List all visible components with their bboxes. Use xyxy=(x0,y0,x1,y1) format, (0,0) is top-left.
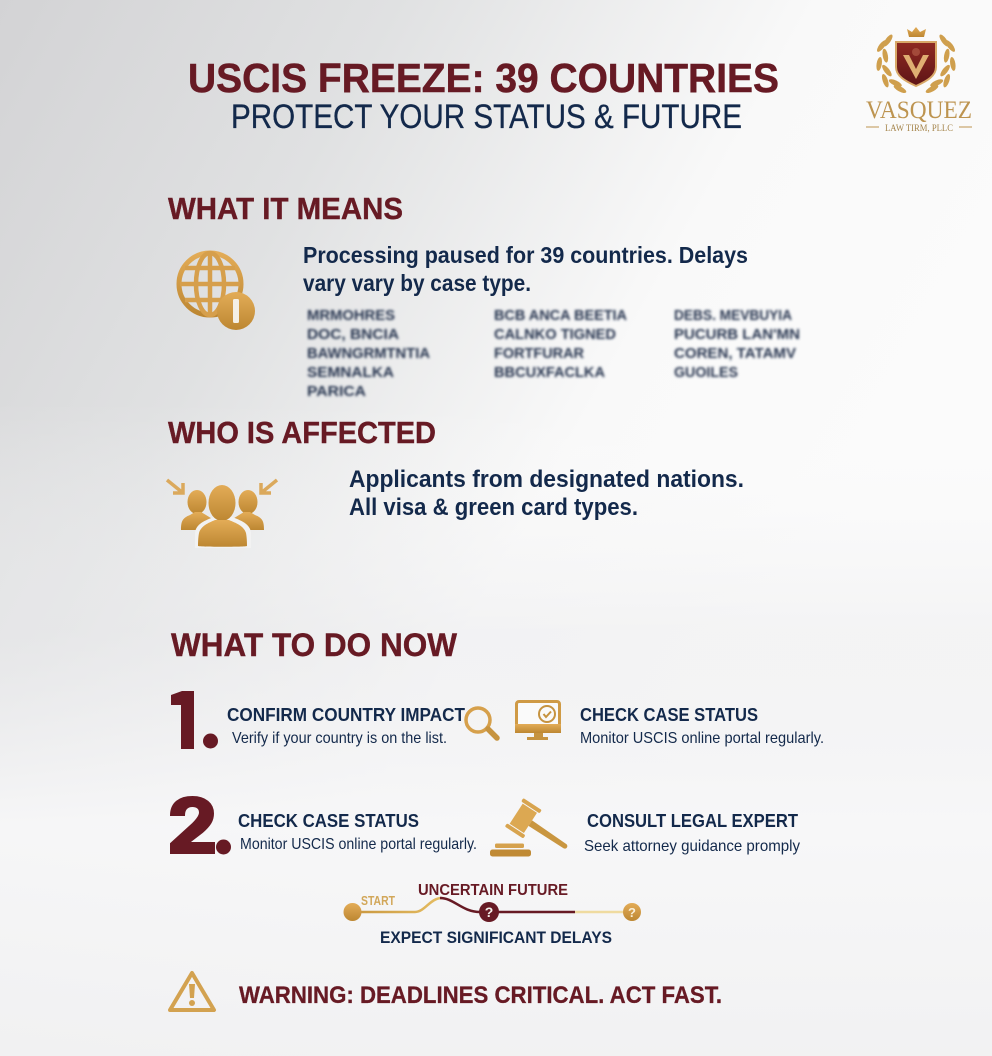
heading: what to do now: WHAT TO DO NOW xyxy=(171,627,458,663)
timeline end marker xyxy=(623,903,641,921)
step 2 secondary text: CONSULT LEGAL EXPERT xyxy=(587,811,798,831)
text: who is affected body: Applicants from designated nations. xyxy=(349,466,744,493)
step 2 text: Monitor USCIS online portal regularly. xyxy=(240,836,477,853)
timeline middle marker xyxy=(479,902,499,922)
blurred country list: BAWNGRMTNTIA xyxy=(307,345,430,362)
blurred country list: PUCURB LAN'MN xyxy=(674,326,800,343)
step 1 text: Verify if your country is on the list. xyxy=(232,730,447,747)
blurred country list: GUOILES xyxy=(674,364,738,381)
text: who is affected body xyxy=(349,466,744,521)
text: who is affected body: All visa & green card types. xyxy=(349,494,638,521)
step number 1 xyxy=(171,691,218,749)
text: what it means body: vary vary by case type. xyxy=(303,270,531,296)
logo wordmark: VASQUEZ xyxy=(866,97,972,124)
timeline: uncertain future xyxy=(344,882,641,947)
warning message: WARNING: DEADLINES CRITICAL. ACT FAST. xyxy=(239,982,722,1009)
title: USCIS FREEZE: 39 COUNTRIES xyxy=(188,55,779,101)
heading: who is affected: WHO IS AFFECTED xyxy=(168,415,436,450)
blurred country list: CALNKO TIGNED xyxy=(494,326,616,343)
step 2 text xyxy=(238,811,477,853)
step 2 secondary text: Seek attorney guidance promply xyxy=(584,838,800,855)
logo tagline: LAW TIRM, PLLC xyxy=(885,124,953,134)
timeline middle marker: ? xyxy=(485,904,493,920)
timeline end marker: ? xyxy=(628,905,636,920)
icon: globe with info badge xyxy=(179,253,255,330)
text: what it means body: Processing paused for 39 countries. Delays xyxy=(303,242,748,268)
step number 2 xyxy=(170,796,231,854)
blurred country list xyxy=(307,307,800,400)
logo: Vasquez Law Firm xyxy=(866,27,972,134)
timeline lower label: EXPECT SIGNIFICANT DELAYS xyxy=(380,929,612,947)
step 1 secondary text: CHECK CASE STATUS xyxy=(580,705,758,725)
title: PROTECT YOUR STATUS & FUTURE xyxy=(231,98,742,136)
step 1 text xyxy=(227,705,465,747)
icon: magnifying glass xyxy=(466,708,497,738)
blurred country list: FORTFURAR xyxy=(494,345,584,362)
blurred country list: PARICA xyxy=(307,383,366,400)
blurred country list: BBCUXFACLKA xyxy=(494,364,605,381)
icon: gavel xyxy=(490,798,577,861)
timeline upper label: UNCERTAIN FUTURE xyxy=(418,882,568,899)
icon: laurel wreath xyxy=(875,33,957,95)
step 1 text: CONFIRM COUNTRY IMPACT xyxy=(227,705,465,725)
timeline start marker xyxy=(344,903,362,921)
text: what it means body xyxy=(303,242,748,296)
blurred country list: COREN, TATAMV xyxy=(674,345,796,362)
heading: what it means: WHAT IT MEANS xyxy=(168,191,403,226)
step 1 secondary text: Monitor USCIS online portal regularly. xyxy=(580,730,824,747)
icon: monitor with check xyxy=(515,702,561,740)
timeline start label: START xyxy=(361,894,395,908)
step 2 text: CHECK CASE STATUS xyxy=(238,811,419,831)
title xyxy=(188,55,779,136)
blurred country list: DOC, BNCIA xyxy=(307,326,399,343)
blurred country list: DEBS. MEVBUYIA xyxy=(674,307,792,324)
blurred country list: BCB ANCA BEETIA xyxy=(494,307,627,324)
icon: group with inward arrows xyxy=(167,480,277,548)
icon: crown xyxy=(907,27,926,37)
step 1 secondary text xyxy=(580,705,824,747)
icon: warning triangle xyxy=(170,973,214,1010)
timeline track xyxy=(353,898,625,912)
step 2 secondary text xyxy=(584,811,800,855)
blurred country list: SEMNALKA xyxy=(307,364,394,381)
icon: shield xyxy=(896,42,936,86)
blurred country list: MRMOHRES xyxy=(307,307,395,324)
